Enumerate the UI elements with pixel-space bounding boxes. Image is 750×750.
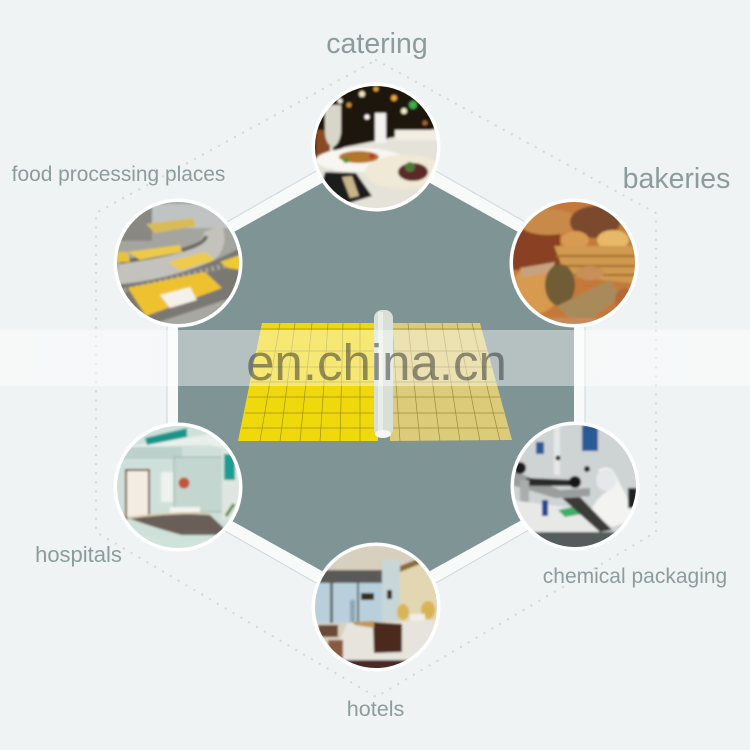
roll of film [374,310,393,438]
photo: bakeries [508,197,640,332]
watermark: en.china.cn [246,334,507,391]
label: chemical packaging: chemical packaging [543,565,727,588]
central grey hexagon [178,153,574,601]
backing sheet half [390,323,512,441]
label: food processing places: food processing places [12,163,225,186]
photo: food processing places [112,196,244,331]
photo: catering [310,80,445,215]
white hexagon outline [167,137,585,617]
photo: hospitals [112,420,244,555]
label: catering: catering [326,28,428,60]
label: bakeries: bakeries [623,163,730,195]
photo: chemical packaging [509,420,641,556]
label: hotels: hotels [347,696,405,721]
translucent white band [0,330,750,386]
label: hospitals: hospitals [35,542,122,567]
product: yellow sticky trap sheet [238,310,512,441]
photo: hotels [310,540,442,675]
dotted outer hexagon [96,60,656,697]
sheet grid lines [242,323,508,441]
yellow sheet half [238,323,378,441]
